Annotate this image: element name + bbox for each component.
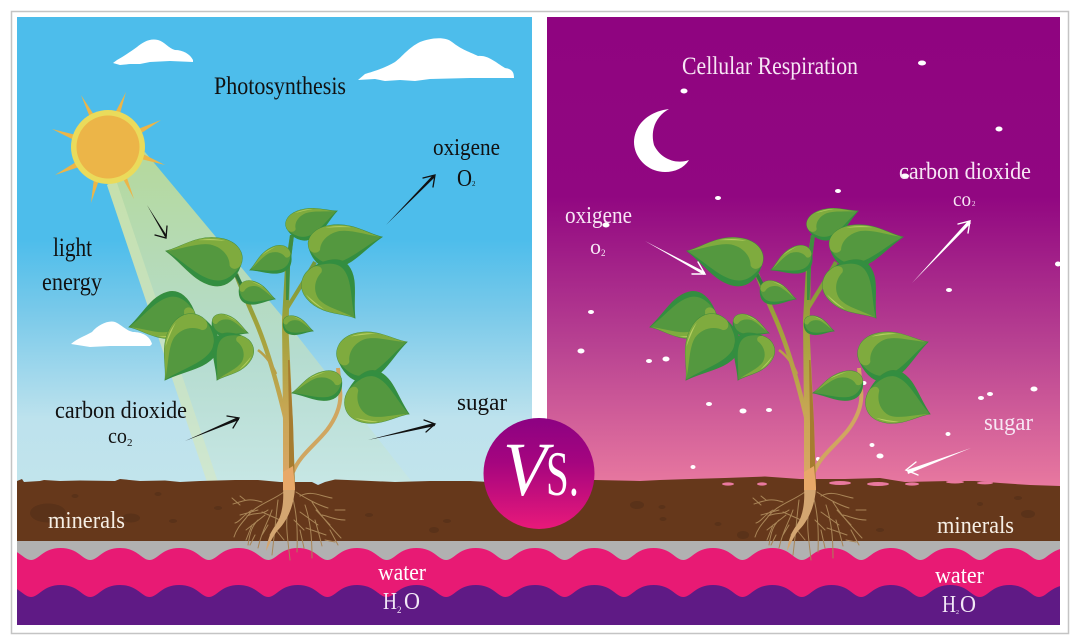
label: H2O right: H — [942, 592, 956, 618]
label: O2 left: 2 — [472, 180, 476, 188]
label: carbon dioxide right — [899, 159, 1031, 211]
plant stems — [234, 235, 340, 490]
plant: respiration side — [644, 197, 941, 560]
label: sugar left: sugar — [457, 390, 507, 416]
label: O2 right: o — [590, 234, 601, 259]
label: carbon dioxide left — [55, 398, 187, 449]
label: carbon dioxide left: 2 — [127, 437, 132, 449]
label: O2 left: O — [457, 166, 472, 192]
plant: photosynthesis side — [123, 197, 420, 560]
arrow: sugar out — [368, 420, 435, 440]
gray subsoil band — [17, 541, 1060, 571]
label: H2O left: 2 — [397, 605, 402, 615]
plant roots — [232, 488, 345, 560]
label: O2 right: 2 — [601, 248, 606, 258]
arrow: carbon dioxide out — [912, 221, 971, 283]
cloud: top right — [358, 38, 514, 81]
label: H2O left — [383, 589, 420, 615]
icon: moon — [634, 109, 689, 172]
arrow: light to leaf — [147, 205, 167, 238]
label: carbon dioxide right: carbon dioxide — [899, 159, 1031, 185]
label: sugar right: sugar — [984, 410, 1033, 436]
heading: cellular respiration: Cellular Respiration — [682, 53, 858, 80]
label: H2O right: 2 — [956, 610, 959, 616]
pink water wave — [17, 548, 1060, 597]
heading: photosynthesis: Photosynthesis — [214, 73, 346, 100]
label: carbon dioxide right: 2 — [972, 200, 976, 208]
label: H2O right: O — [960, 592, 976, 618]
panel: photosynthesis sky — [17, 17, 532, 487]
label: H2O left: H — [383, 589, 397, 615]
soil band — [17, 476, 1060, 541]
badge: VS — [484, 418, 594, 529]
icon: sun — [52, 92, 165, 203]
label: carbon dioxide right: co — [953, 189, 971, 211]
label: oxigene left: oxigene — [433, 135, 500, 161]
stars — [578, 60, 1061, 469]
badge: VS: S. — [546, 438, 579, 509]
label: minerals right: minerals — [937, 513, 1014, 539]
label: light energy: energy — [42, 269, 102, 296]
label: H2O left: O — [404, 589, 420, 615]
arrow: oxygen out — [386, 175, 435, 225]
plant leaves — [123, 197, 420, 439]
arrow: sugar in — [906, 448, 971, 475]
purple water wave — [0, 585, 1080, 625]
label: oxigene right: oxigene — [565, 203, 632, 229]
label: water right: water — [935, 563, 984, 589]
light beam — [107, 152, 412, 482]
label: light energy: light — [53, 233, 93, 262]
label: H2O right — [942, 592, 976, 618]
label: water left: water — [378, 560, 426, 586]
arrow: oxygen in — [645, 241, 705, 275]
label: carbon dioxide left: carbon dioxide — [55, 398, 187, 424]
label: carbon dioxide left: co — [108, 423, 127, 448]
label: minerals left: minerals — [48, 508, 125, 534]
arrow: carbon dioxide in — [185, 416, 239, 441]
panel: cellular respiration sky — [547, 17, 1060, 487]
badge: VS: V — [503, 428, 554, 512]
cloud: top left — [113, 39, 193, 65]
label: light energy — [42, 233, 102, 296]
cloud: lower left — [71, 322, 152, 347]
